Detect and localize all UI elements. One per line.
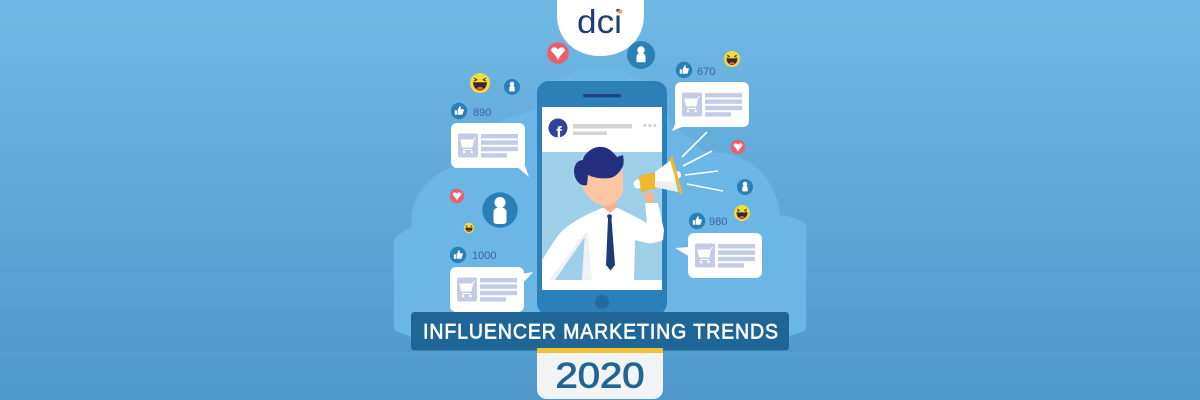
icon: heart top	[547, 42, 569, 64]
like count 670: 670	[697, 66, 715, 78]
year badge	[537, 348, 663, 399]
inner arm gap	[550, 233, 585, 280]
hand	[643, 192, 655, 203]
tie	[606, 214, 615, 270]
title text: INFLUENCER MARKETING TRENDS	[423, 321, 778, 344]
icon: heart left	[450, 189, 464, 203]
like count 890: 890	[473, 107, 491, 119]
icon: emoji left small	[464, 223, 474, 233]
icon: heart right	[731, 140, 745, 154]
man with megaphone	[542, 147, 682, 290]
phone screen	[542, 107, 662, 290]
phone home button	[595, 295, 609, 309]
phone speaker	[583, 94, 621, 97]
comment card 980	[675, 233, 762, 278]
shirt shadow	[582, 233, 592, 280]
icon: emoji right top	[724, 51, 740, 67]
icon: person left top	[504, 79, 520, 95]
logo text: dci	[577, 3, 622, 40]
comment card 890	[451, 123, 529, 177]
sound lines	[682, 132, 723, 191]
like count 980	[689, 213, 727, 229]
phone body	[537, 81, 667, 315]
shirt	[542, 203, 664, 280]
icon: person left large	[482, 192, 518, 228]
icon: person top	[627, 41, 655, 69]
icon: emoji left top	[470, 73, 490, 93]
megaphone body	[639, 172, 657, 192]
comment card 670	[672, 82, 749, 131]
screen photo area	[542, 152, 662, 280]
icon: person right	[737, 179, 753, 195]
hair	[574, 147, 624, 185]
megaphone	[634, 156, 682, 194]
like count 1000: 1000	[472, 250, 496, 262]
megaphone rim	[670, 156, 682, 194]
like count 890	[451, 103, 491, 119]
facebook post header	[548, 118, 657, 142]
phone	[537, 81, 682, 315]
like count 670	[676, 62, 715, 78]
cloud backdrop	[394, 69, 806, 350]
megaphone cone	[655, 160, 678, 192]
face	[582, 165, 623, 206]
like count 980: 980	[709, 216, 727, 228]
title banner	[411, 312, 789, 350]
icon: facebook: f	[556, 123, 562, 142]
icon: emoji right lower	[734, 205, 750, 221]
logo tab	[557, 0, 644, 56]
neck	[604, 202, 616, 213]
year text: 2020	[556, 356, 644, 396]
comment card 1000	[450, 267, 533, 312]
megaphone back cap	[634, 180, 642, 188]
like count 1000	[450, 247, 496, 263]
